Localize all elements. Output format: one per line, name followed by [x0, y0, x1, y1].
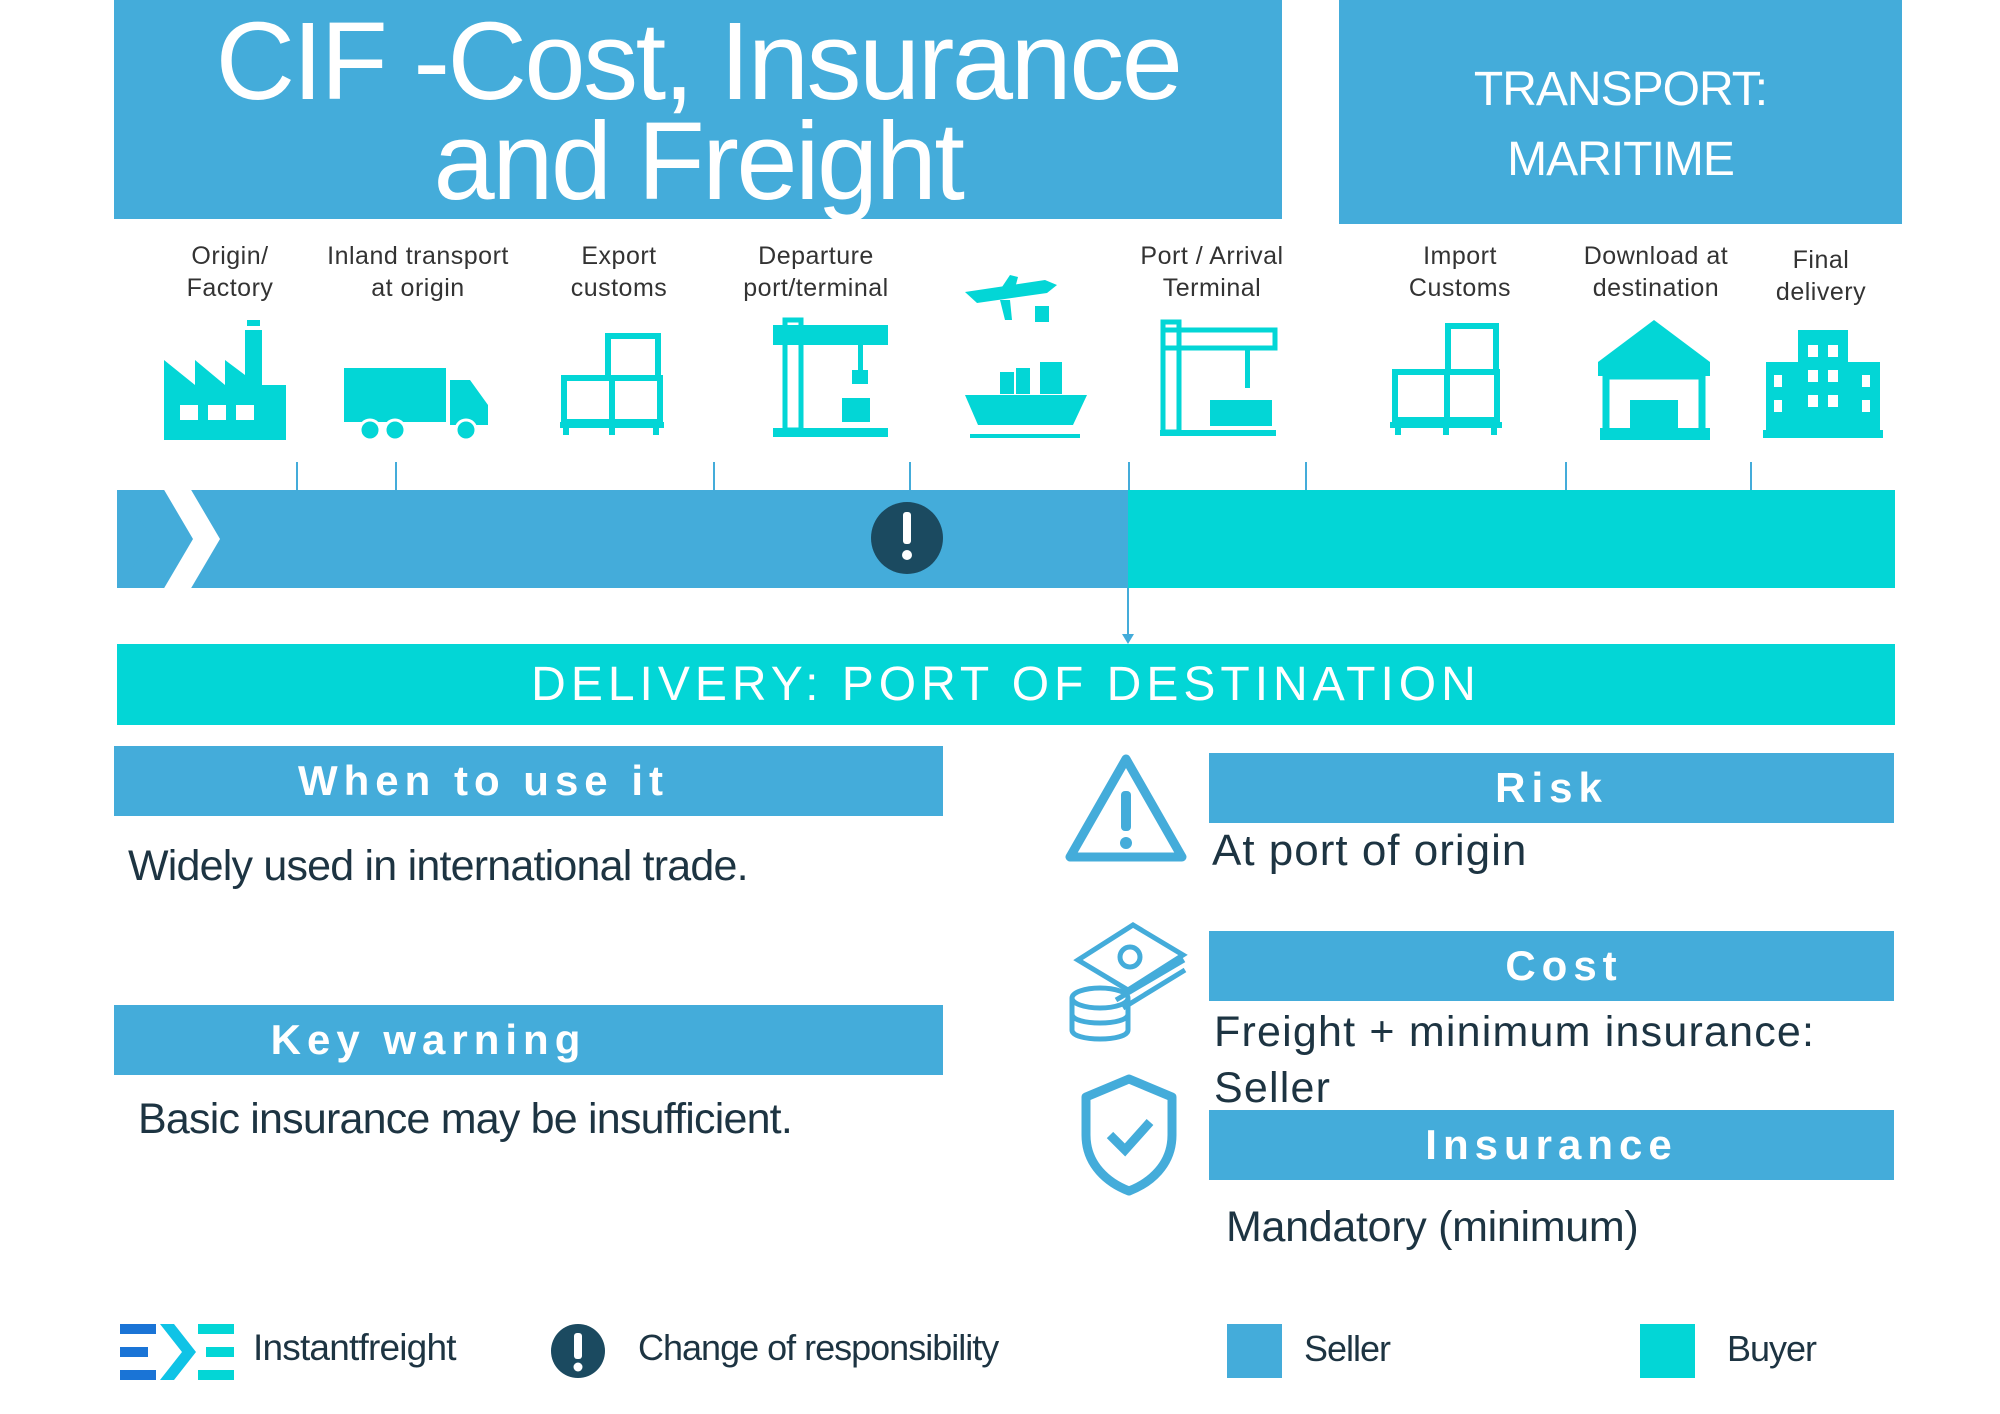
title: and Freight	[434, 100, 962, 223]
key warning header: Key warning	[271, 1016, 586, 1063]
step labels: Origin/	[191, 242, 269, 270]
step labels: Import	[1423, 242, 1497, 270]
step labels: delivery	[1776, 278, 1866, 306]
icons row	[164, 275, 1883, 440]
arrow	[1122, 588, 1134, 644]
insurance text: Mandatory (minimum)	[1226, 1203, 1638, 1251]
when to use header: When to use it	[298, 757, 669, 804]
warning text: Basic insurance may be insufficient.	[138, 1095, 792, 1143]
step labels: Inland transport	[327, 242, 509, 270]
step labels: Factory	[187, 274, 273, 302]
risk header	[1209, 753, 1894, 823]
icon: shield	[1082, 1074, 1176, 1196]
step labels: Final	[1793, 246, 1849, 274]
step labels: port/terminal	[743, 274, 889, 302]
icon: ship	[965, 362, 1087, 436]
step labels	[187, 242, 1866, 306]
icon: boxes import	[1390, 326, 1502, 435]
icon: truck	[344, 368, 488, 440]
seller swatch	[1227, 1324, 1282, 1378]
legend: Instantfreight	[253, 1327, 456, 1368]
delivery bar: DELIVERY: PORT OF DESTINATION	[531, 658, 1481, 711]
chevrons	[117, 490, 195, 588]
risk header: Risk	[1495, 764, 1608, 811]
icon: crane departure	[773, 320, 888, 437]
key warning header	[114, 1005, 943, 1075]
title	[114, 0, 1282, 219]
legend: Change of responsibility	[638, 1327, 998, 1368]
risk text: At port of origin	[1212, 826, 1527, 875]
legend: Buyer	[1727, 1328, 1816, 1369]
icon: change of responsibility	[871, 502, 943, 574]
delivery bar	[117, 644, 1895, 725]
step labels: customs	[571, 274, 667, 302]
icon: legend exclamation	[551, 1324, 605, 1378]
transport box: MARITIME	[1507, 133, 1734, 186]
step labels: Port / Arrival	[1140, 242, 1284, 270]
step labels: Export	[581, 242, 657, 270]
when text: Widely used in international trade.	[128, 842, 748, 890]
transport box: TRANSPORT:	[1474, 63, 1767, 116]
step labels: destination	[1593, 274, 1719, 302]
icon: warehouse	[1598, 320, 1710, 440]
insurance header: Insurance	[1425, 1121, 1678, 1168]
step labels: at origin	[371, 274, 465, 302]
cost text: Seller	[1214, 1064, 1331, 1112]
when to use header	[114, 746, 943, 816]
step labels: Departure	[758, 242, 874, 270]
icon: warning triangle	[1066, 754, 1186, 862]
transport box	[1339, 0, 1902, 224]
buyer swatch	[1640, 1324, 1695, 1378]
cost header: Cost	[1505, 942, 1623, 989]
icon: factory	[164, 320, 286, 440]
legend	[120, 1324, 1816, 1380]
timeline bar	[117, 490, 1895, 644]
cost text	[1214, 1008, 1815, 1112]
logo	[120, 1324, 234, 1380]
legend: Seller	[1304, 1328, 1390, 1369]
icon: building	[1763, 330, 1883, 438]
cost text: Freight + minimum insurance:	[1214, 1008, 1815, 1056]
icon: plane	[965, 275, 1057, 322]
step labels: Terminal	[1163, 274, 1261, 302]
icon: money	[1070, 922, 1188, 1042]
step labels: Customs	[1409, 274, 1511, 302]
title: CIF -Cost, Insurance	[216, 0, 1180, 123]
step labels: Download at	[1584, 242, 1728, 270]
icon: boxes export	[560, 336, 664, 435]
insurance header	[1209, 1110, 1894, 1180]
cost header	[1209, 931, 1894, 1001]
icon: crane arrival	[1160, 322, 1276, 436]
